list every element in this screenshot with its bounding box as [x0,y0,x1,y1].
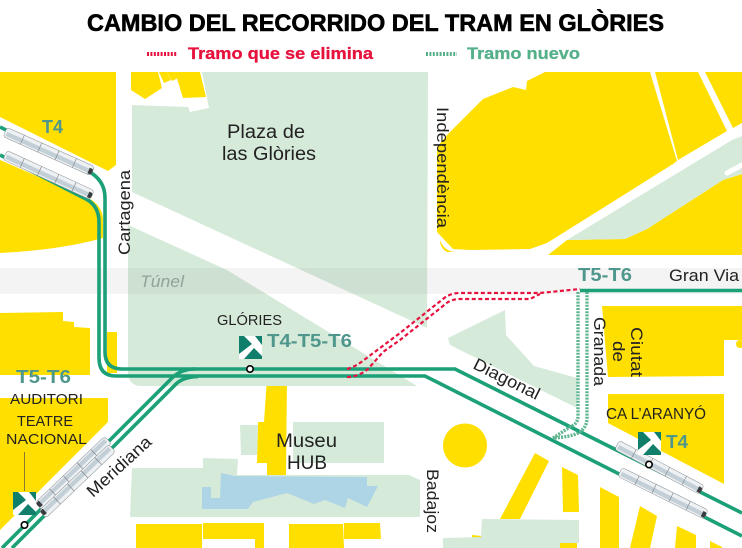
icon: Auditori station [13,452,36,528]
icon: Glòries station [239,336,262,372]
label: Ciutat de: de [609,341,628,362]
line: T5-T6 lower [12,376,198,548]
label: T5-T6 west: T5-T6 [16,367,71,387]
label: Granada: Granada [590,317,609,387]
label: Museu HUB [276,431,337,474]
label: Auditori Teatre Nacional: AUDITORI [10,391,83,408]
label: Badajoz: Badajoz [423,469,442,533]
label: T4-T5-T6: T4-T5-T6 [267,331,352,351]
line: T4 south [0,155,742,536]
label: Plaza de las Glòries: las Glòries [222,144,316,165]
label: Auditori Teatre Nacional: TEATRE [17,413,73,430]
map: green areas [128,72,742,548]
trains: T4 west [3,127,95,200]
trains: T4 east [615,441,708,519]
label: Museu HUB: HUB [287,453,327,474]
label: Diagonal: Diagonal [470,355,543,404]
legend [147,44,580,63]
label: Túnel: Túnel [140,272,185,291]
tram lines [0,127,742,548]
label: T4 west: T4 [42,117,63,137]
tunnel band [0,268,742,294]
label: T5-T6 Gran Via: T5-T6 [578,265,632,285]
map: water feature [202,473,378,509]
legend: tramo que se elimina: Tramo que se elimina [188,44,374,63]
trains: Meridiana [35,436,115,518]
label: Plaza de las Glòries: Plaza de [227,122,305,143]
new section (green dotted) [553,292,587,438]
removed section (red dashed) [347,289,580,377]
label: Ciutat de: Ciutat [627,327,646,377]
icon: Ca l'Aranyó station [638,432,661,468]
line: Gran Via [580,289,742,292]
label: Auditori Teatre Nacional [6,391,87,448]
legend: tramo nuevo: Tramo nuevo [467,44,580,63]
label: Auditori Teatre Nacional: NACIONAL [6,431,87,448]
label: Independència: Independència [433,107,452,229]
label: Ciutat de [609,327,646,377]
label: Meridiana: Meridiana [83,432,156,501]
title: CAMBIO DEL RECORRIDO DEL TRAM EN GLÒRIES [87,9,664,37]
label: Museu HUB: Museu [276,431,337,452]
label: Glòries: GLÓRIES [217,312,282,329]
label: T4 east: T4 [666,432,688,452]
line: T4 north [0,127,742,513]
label: Plaza de las Glòries [222,122,316,165]
label: Gran Via: Gran Via [669,266,740,285]
label: Cartagena: Cartagena [115,169,134,255]
line: T5-T6 upper [2,369,195,548]
label: Ca l'Aranyó: CA L’ARANYÓ [606,404,706,423]
